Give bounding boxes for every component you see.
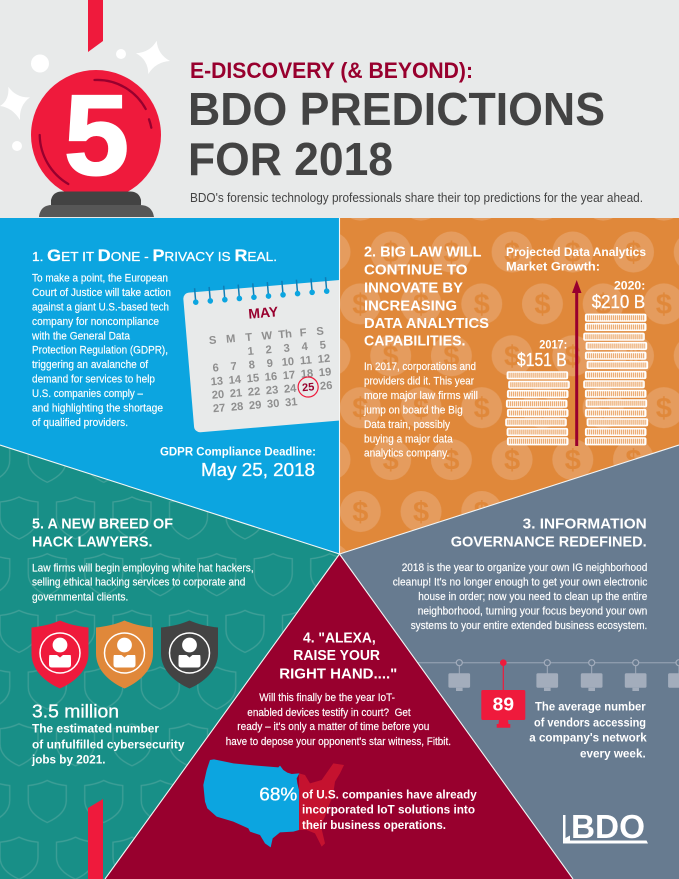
icon: dark shield xyxy=(161,620,218,688)
stat: 3.5 million: 3.5 million xyxy=(32,701,119,722)
server stack: 2020 xyxy=(584,314,647,445)
heading: big law: DATA ANALYTICS xyxy=(364,315,489,332)
callout: GDPR deadline: GDPR Compliance Deadline: xyxy=(160,444,316,458)
body text: big law: analytics company. xyxy=(364,447,449,459)
stat: vendors xyxy=(529,700,647,760)
icon: orange shield xyxy=(96,620,153,688)
stat: 68 percent: of U.S. companies have already xyxy=(302,787,477,801)
body text: hack lawyers xyxy=(32,562,254,603)
body text: information governance: house in order; now you need to clean up the entire xyxy=(418,591,647,603)
body text: information governance: cleanup! It's no longer enough to get your own electronic xyxy=(393,576,648,588)
calendar: 2 xyxy=(265,344,272,356)
calendar: 30 xyxy=(267,398,280,411)
icon: crystal ball xyxy=(31,70,161,217)
body text: hack lawyers: governmental clients. xyxy=(32,591,128,603)
calendar: 26 xyxy=(320,380,333,393)
chart title: Projected Data Analytics xyxy=(506,245,646,259)
body text: big law: providers did it. This year xyxy=(364,375,474,387)
calendar: 28 xyxy=(230,401,244,414)
stat: vendors: a company's network xyxy=(529,731,647,745)
calendar: 22 xyxy=(247,386,261,399)
label: 2020 value: 2020: xyxy=(614,279,645,293)
calendar: M xyxy=(226,333,236,346)
heading: big law: CAPABILITIES. xyxy=(364,333,466,350)
body text: privacy: and highlighting the shortage xyxy=(32,402,163,414)
calendar: 15 xyxy=(246,372,260,385)
body text: information governance xyxy=(393,562,648,632)
map: united states 68 percent xyxy=(203,759,344,847)
heading: alexa: 4. "ALEXA, xyxy=(303,630,376,647)
body text: alexa: Will this finally be the year IoT- xyxy=(259,692,395,704)
stat: 68 percent: their business operations. xyxy=(302,818,446,832)
logo: BDO: BDO xyxy=(571,808,645,845)
calendar: T xyxy=(245,332,253,344)
icon: red monitor with 89: 89 xyxy=(493,694,514,715)
calendar: Th xyxy=(278,328,293,341)
calendar: 9 xyxy=(266,358,273,370)
calendar: 17 xyxy=(282,369,296,382)
body text: big law: buying a major data xyxy=(364,434,453,446)
chart title xyxy=(506,245,646,274)
callout: GDPR deadline xyxy=(160,444,316,480)
body text: hack lawyers: selling ethical hacking services to corporate and xyxy=(32,576,245,588)
calendar: 3 xyxy=(283,342,290,355)
panel 2: big law xyxy=(340,218,679,554)
body text: privacy: company for noncompliance xyxy=(32,316,159,328)
body text: privacy: U.S. companies comply – xyxy=(32,388,143,400)
calendar xyxy=(183,275,359,433)
stat: 68 percent: 68% xyxy=(259,784,297,805)
body text: alexa: enabled devices testify in court? Get xyxy=(247,707,411,719)
body text: privacy: triggering an avalanche of xyxy=(32,359,148,371)
network of vendor computers xyxy=(417,660,679,691)
label: 2017 value: 2017: xyxy=(539,337,567,351)
panel 4: alexa xyxy=(105,554,573,879)
header background xyxy=(0,0,679,218)
heading: big law: INCREASING xyxy=(364,297,457,314)
heading: alexa: RAISE YOUR xyxy=(293,647,380,664)
stat: vendors: every week. xyxy=(580,746,646,760)
body text: big law: In 2017, corporations and xyxy=(364,361,476,373)
icon: red monitor with 89 xyxy=(481,659,525,728)
calendar: W xyxy=(261,330,273,343)
chart title: Market Growth: xyxy=(506,260,600,274)
panel 5: hack lawyers xyxy=(0,445,340,879)
body text: big law: jump on board the Big xyxy=(363,404,463,416)
heading: privacy is real: 1. GET IT DONE - PRIVACY IS REAL. xyxy=(32,246,277,265)
icon: crystal ball: 5 xyxy=(64,72,129,200)
title: FOR 2018 xyxy=(188,133,393,185)
stat: 68 percent: incorporated IoT solutions into xyxy=(302,802,475,816)
body text: big law: Data train, possibly xyxy=(364,419,451,431)
calendar: 5 xyxy=(319,339,326,352)
label: 2017 value xyxy=(517,337,567,370)
arrow: growth xyxy=(572,280,582,446)
calendar: 31 xyxy=(285,396,298,409)
stat: 3.5 million xyxy=(31,701,185,766)
heading: alexa xyxy=(279,630,397,682)
calendar: 4 xyxy=(301,341,309,353)
calendar: 29 xyxy=(249,399,262,412)
calendar: 8 xyxy=(248,359,255,372)
server stack: 2017 xyxy=(506,372,569,445)
body text: information governance: 2018 is the year to organize your own IG neighborhood xyxy=(402,562,647,574)
calendar: 11 xyxy=(300,354,312,367)
body text: alexa: have to depose your opponent's star witness, Fitbit. xyxy=(226,736,451,748)
heading: hack lawyers xyxy=(32,515,173,551)
body text: hack lawyers: Law firms will begin employing white hat hackers, xyxy=(32,562,254,574)
subtitle: BDO's forensic technology professionals share their top predictions for the year ahead. xyxy=(190,191,643,205)
label: 2020 value: $210 B xyxy=(592,291,645,312)
body text: information governance: systems to your entire extended business ecosystem. xyxy=(411,620,647,632)
body text: privacy: demand for services to help xyxy=(32,374,155,386)
title xyxy=(188,58,605,185)
calendar: 24 xyxy=(283,383,298,396)
calendar: 21 xyxy=(229,387,243,400)
panel 1: privacy xyxy=(0,218,359,554)
body text: privacy xyxy=(31,272,171,429)
heading: hack lawyers: HACK LAWYERS. xyxy=(32,534,152,551)
calendar: 7 xyxy=(230,361,237,373)
body text: privacy: of qualified providers. xyxy=(32,417,128,429)
body text: privacy: against a giant U.S.-based tech xyxy=(32,301,169,313)
calendar: S xyxy=(209,335,217,347)
heading: information governance: 3. INFORMATION xyxy=(523,515,647,532)
calendar: MAY xyxy=(248,303,279,322)
title: E-DISCOVERY (& BEYOND): xyxy=(190,58,473,83)
body text: privacy: with the General Data xyxy=(31,330,130,342)
calendar: 12 xyxy=(317,353,331,366)
calendar: 13 xyxy=(210,375,224,388)
calendar: 6 xyxy=(212,362,219,375)
chart: projected data analytics market growth xyxy=(506,245,647,446)
stat: 3.5 million: The estimated number xyxy=(32,722,159,736)
body text: big law: more major law firms will xyxy=(364,390,478,402)
calendar: 14 xyxy=(228,374,242,387)
calendar: 25 xyxy=(302,381,315,394)
icon: red shield xyxy=(32,620,88,688)
heading: big law: INNOVATE BY xyxy=(364,279,463,296)
heading: big law xyxy=(364,244,489,350)
body text: privacy: To make a point, the European xyxy=(32,272,168,284)
stat: 3.5 million: of unfulfilled cybersecurity xyxy=(32,738,185,752)
ribbon: bottom xyxy=(88,799,103,879)
ribbon: top xyxy=(88,0,103,52)
body text: privacy: Court of Justice will take action xyxy=(32,287,171,299)
heading: information governance xyxy=(451,515,647,551)
panel dividers xyxy=(0,218,679,879)
calendar: 10 xyxy=(281,356,295,369)
body text: information governance: neighborhood, turning your focus beyond your own xyxy=(418,605,647,617)
callout: GDPR deadline: May 25, 2018 xyxy=(201,459,315,480)
stat: 3.5 million: jobs by 2021. xyxy=(31,752,106,766)
heading: hack lawyers: 5. A NEW BREED OF xyxy=(32,515,173,532)
panel 3: information governance xyxy=(340,445,679,879)
calendar: 18 xyxy=(300,368,314,381)
stat: vendors: The average number xyxy=(535,700,646,714)
calendar: 23 xyxy=(265,384,279,397)
body text: big law xyxy=(363,361,478,459)
stat: vendors: of vendors accessing xyxy=(534,716,646,730)
sparkles and dots xyxy=(0,41,170,151)
heading: big law: 2. BIG LAW WILL xyxy=(364,244,482,261)
calendar: 20 xyxy=(211,389,225,402)
calendar: 16 xyxy=(264,371,278,384)
label: 2017 value: $151 B xyxy=(517,349,567,370)
calendar: F xyxy=(299,327,307,340)
body text: privacy: Protection Regulation (GDPR), xyxy=(32,345,168,357)
label: 2020 value xyxy=(592,279,645,312)
heading: big law: CONTINUE TO xyxy=(364,261,468,278)
calendar: S xyxy=(316,326,325,338)
heading: alexa: RIGHT HAND...." xyxy=(279,665,397,682)
body text: alexa: ready – it's only a matter of time before you xyxy=(237,721,429,733)
body text: alexa xyxy=(226,692,451,748)
calendar: 19 xyxy=(318,366,332,379)
calendar: 27 xyxy=(212,402,226,415)
stat: 68 percent xyxy=(259,784,477,832)
heading: information governance: GOVERNANCE REDEFINED. xyxy=(451,534,647,551)
calendar: 1 xyxy=(247,345,254,358)
title: BDO PREDICTIONS xyxy=(188,83,605,135)
